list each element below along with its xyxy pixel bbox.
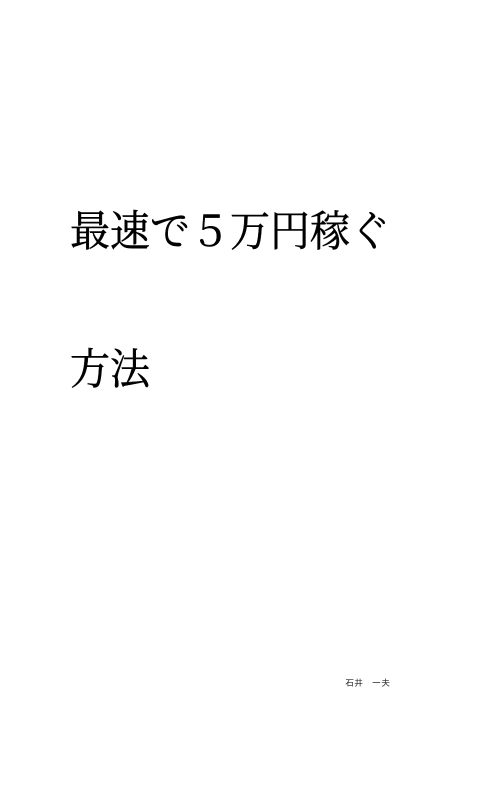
author name: 石井 一夫 bbox=[345, 678, 390, 688]
title line 2: 方法 bbox=[70, 346, 150, 394]
title line 1: 最速で５万円稼ぐ bbox=[70, 208, 390, 256]
